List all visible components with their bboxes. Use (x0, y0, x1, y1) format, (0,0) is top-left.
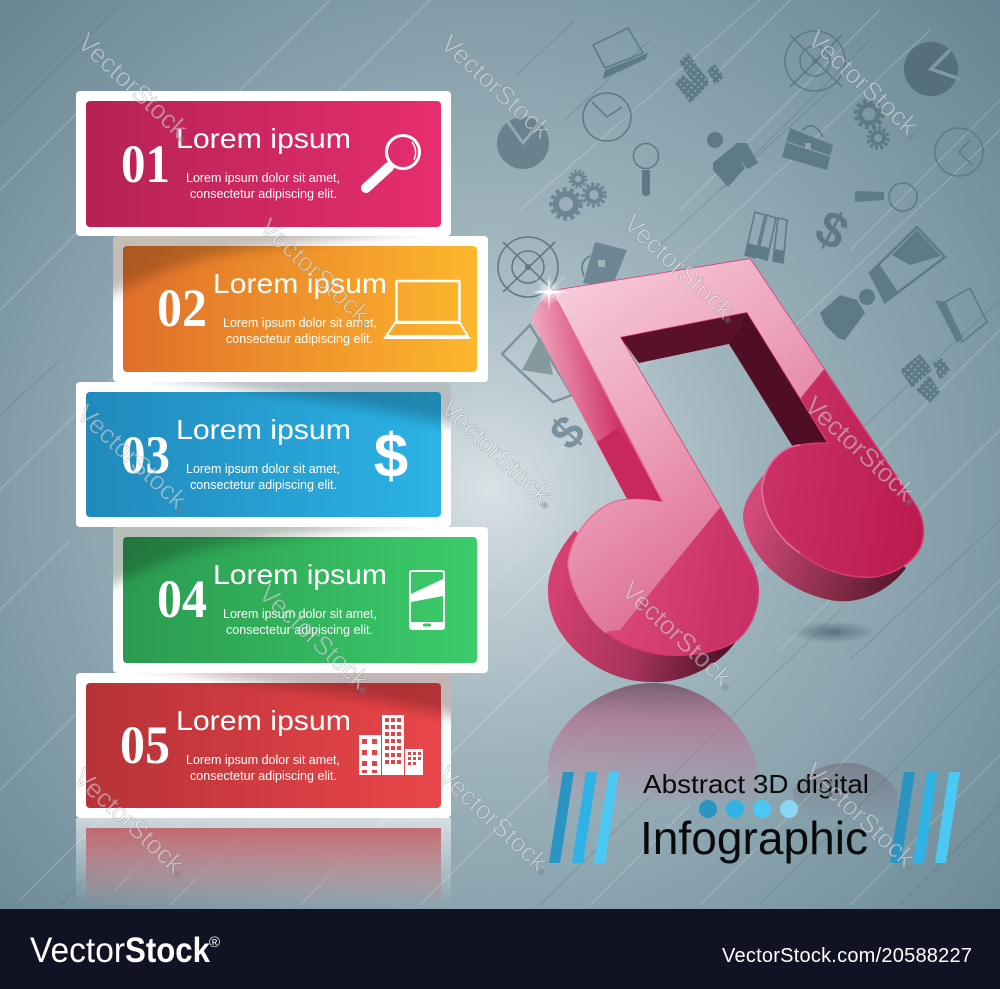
icon: magnifier (366, 136, 420, 188)
logo title: Infographic (640, 812, 868, 864)
window inner walls (620, 312, 747, 363)
text block (223, 607, 377, 637)
text block: Lorem ipsum dolor sit amet, (223, 607, 377, 621)
watermarks: VectorStock® (435, 393, 561, 514)
text block (223, 316, 377, 346)
card shadow (156, 382, 451, 432)
number 01: 01 (121, 134, 170, 194)
icon: laptop (385, 281, 469, 339)
icon: pie chart (904, 42, 960, 96)
watermarks: VectorStock® (799, 756, 925, 877)
number 04: 04 (157, 569, 207, 629)
text block: Lorem ipsum dolor sit amet, (186, 462, 340, 476)
icon: target 2 (498, 237, 558, 297)
icon: clock (583, 93, 631, 141)
text block (186, 171, 340, 201)
logo: left stripes (549, 772, 619, 863)
note stem side wall (531, 291, 665, 503)
icon: laptop 2 (935, 288, 987, 343)
footer logo (30, 931, 220, 970)
panel: card 3 (76, 382, 451, 527)
icon: buildings 2 (900, 354, 950, 403)
watermarks: VectorStock® (72, 27, 198, 148)
icon: businessman 2 (820, 289, 875, 340)
text block: consectetur adipiscing elit. (190, 478, 337, 492)
icon: clock 2 (935, 128, 983, 176)
icon: dollar 2: $ (539, 405, 595, 459)
card shadow (113, 527, 416, 592)
text block: Lorem ipsum dolor sit amet, (223, 316, 377, 330)
text block: consectetur adipiscing elit. (190, 187, 337, 201)
text block: consectetur adipiscing elit. (226, 332, 373, 346)
icon: buildings (675, 53, 724, 103)
sparkle (532, 274, 568, 312)
head rim highlights (552, 291, 800, 633)
logo heading: Abstract 3D digital (643, 769, 869, 799)
watermarks: VectorStock® (68, 762, 194, 883)
text block: Lorem ipsum dolor sit amet, (186, 171, 340, 185)
logo: right stripes (890, 772, 960, 863)
panel: card 2 (100, 226, 488, 382)
footer logo: Stock (125, 931, 210, 970)
icon: smartphone (410, 571, 444, 629)
icon: dollar: $ (374, 422, 408, 491)
watermarks: VectorStock® (432, 760, 558, 881)
icon: gears 2 (552, 171, 605, 218)
icon: gears (856, 100, 888, 148)
icon: briefcase (782, 126, 833, 170)
watermarks: VectorStock® (435, 28, 561, 149)
watermarks: VectorStock® (616, 575, 742, 696)
text block (186, 462, 340, 492)
watermarks: VectorStock® (799, 390, 925, 511)
background business icons (497, 28, 987, 459)
panel: card 1 (76, 91, 451, 236)
icon: businessman (707, 132, 758, 187)
card reflection (76, 818, 451, 906)
icon: tablet 2 (502, 325, 572, 402)
note front face (552, 259, 924, 655)
icon: magnifier 2 (855, 183, 917, 211)
heading: Lorem ipsum (176, 123, 351, 154)
music note 3D (530, 240, 924, 682)
icon: magnifier (634, 144, 658, 196)
footer logo: ® (209, 934, 220, 951)
watermarks: VectorStock® (254, 212, 380, 333)
icon: dollar: $ (807, 199, 858, 261)
left note head side (548, 530, 737, 682)
heading: Lorem ipsum (176, 705, 351, 736)
footer image id: VectorStock.com/20588227 (722, 945, 972, 967)
watermarks: VectorStock® (618, 208, 744, 329)
card shadow (113, 236, 416, 301)
right note head side (743, 470, 906, 601)
text block: Lorem ipsum dolor sit amet, (186, 753, 340, 767)
heading: Lorem ipsum (176, 414, 351, 445)
card shadow (156, 673, 451, 724)
panel: card 5 (76, 673, 451, 818)
number 05: 05 (120, 715, 170, 775)
logo dots (699, 800, 798, 818)
icon: laptop (593, 28, 648, 79)
text block: consectetur adipiscing elit. (226, 623, 373, 637)
number 02: 02 (157, 278, 207, 338)
panel: card 4 (100, 517, 488, 673)
watermarks: VectorStock® (71, 398, 197, 519)
shadow under right note head (791, 621, 875, 643)
watermarks: VectorStock® (802, 24, 928, 145)
icon: buildings (359, 715, 423, 775)
heading: Lorem ipsum (213, 559, 387, 590)
icon: briefcase 2 (582, 242, 627, 287)
reflection of the music note (548, 683, 897, 820)
text block: consectetur adipiscing elit. (190, 769, 337, 783)
watermarks (68, 24, 928, 883)
heading: Lorem ipsum (213, 268, 387, 299)
footer bar (0, 909, 1000, 989)
icon: tablet (870, 227, 945, 302)
icon: binders (745, 212, 787, 263)
icon: target (785, 31, 845, 91)
footer logo: Vector (30, 931, 125, 970)
watermarks: VectorStock® (253, 578, 379, 699)
number 03: 03 (121, 425, 170, 485)
icon: pie chart 2 (497, 117, 549, 169)
text block (186, 753, 340, 783)
note gloss (553, 259, 824, 632)
